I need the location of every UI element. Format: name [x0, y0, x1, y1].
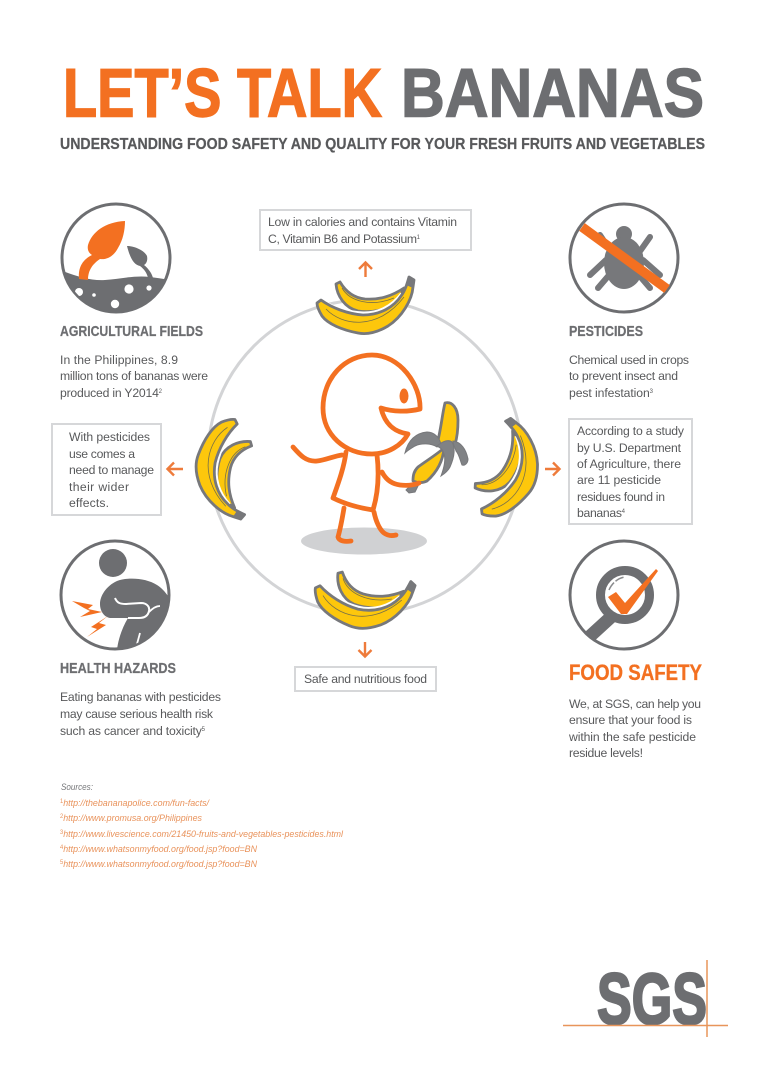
callout: nutrition: [260, 210, 471, 250]
text: food safety: within the safe pesticide: [568, 730, 696, 744]
callout: USDA study: by U.S. Department: [577, 441, 682, 455]
banana: left: [188, 414, 262, 521]
arrow: right: [545, 462, 560, 476]
text: health hazards: [60, 690, 221, 738]
text: health hazards: such as cancer and toxicity: [60, 724, 202, 738]
banana: right: [459, 416, 558, 529]
logo: SGS: SGS: [597, 960, 707, 1040]
heading: health hazards: HEALTH HAZARDS: [60, 660, 176, 677]
title: LET’S TALK: [63, 54, 382, 132]
sources: 3: [60, 830, 64, 836]
heading: pesticides: PESTICIDES: [569, 323, 643, 340]
title: [63, 54, 704, 132]
sources: Sources:: [61, 782, 93, 792]
sources: 5: [60, 860, 64, 866]
callout: USDA study: According to a study: [577, 424, 685, 438]
text: agricultural fields: 2: [159, 389, 163, 395]
callout: safe food: Safe and nutritious food: [304, 672, 427, 686]
callout: wider effects: effects.: [69, 496, 109, 510]
icon: health hazards: [61, 541, 175, 650]
text: health hazards: may cause serious health risk: [60, 707, 214, 721]
callout: wider effects: need to manage: [69, 463, 154, 477]
callout: wider effects: their wider: [69, 480, 129, 494]
text: pesticides: to prevent insect and: [569, 369, 678, 383]
heading: agricultural fields: AGRICULTURAL FIELDS: [60, 323, 203, 340]
sources: http://thebananapolice.com/fun-facts/: [63, 798, 210, 808]
callout: nutrition: Low in calories and contains Vitamin: [268, 215, 457, 229]
sources: 1: [60, 799, 64, 805]
sources: http://www.whatsonmyfood.org/food.jsp?food=BN: [63, 844, 257, 854]
subtitle: UNDERSTANDING FOOD SAFETY AND QUALITY FOR YOUR FRESH FRUITS AND VEGETABLES: [60, 136, 705, 153]
callout: nutrition: 1: [417, 235, 421, 241]
text: food safety: ensure that your food is: [569, 713, 692, 727]
sources: 4: [60, 845, 64, 851]
callout: USDA study: bananas: [577, 506, 622, 520]
callout: wider effects: [52, 424, 161, 515]
sources: http://www.promusa.org/Philippines: [63, 813, 202, 823]
sources: [60, 782, 344, 869]
text: food safety: residue levels!: [569, 746, 643, 760]
large centre ring: [208, 300, 522, 614]
icon: pesticides: [570, 204, 678, 312]
text: agricultural fields: [60, 353, 208, 400]
callout: USDA study: [569, 419, 692, 524]
heading: food safety: FOOD SAFETY: [569, 660, 702, 685]
character eating a banana: [293, 355, 468, 554]
title: BANANAS: [401, 54, 704, 132]
text: health hazards: Eating bananas with pesticides: [60, 690, 221, 704]
icon: agricultural fields: [60, 202, 172, 314]
text: agricultural fields: produced in Y2014: [60, 386, 159, 400]
callout: USDA study: of Agriculture, there: [577, 457, 681, 471]
text: pesticides: Chemical used in crops: [569, 353, 689, 367]
arrow: down: [358, 642, 372, 656]
sources: 2: [60, 814, 64, 820]
callout: USDA study: are 11 pesticide: [577, 473, 661, 487]
text: pesticides: 3: [650, 389, 654, 395]
callout: USDA study: residues found in: [577, 490, 665, 504]
callout: safe food: [295, 667, 436, 691]
callout: wider effects: With pesticides: [69, 430, 150, 444]
banana: top: [317, 276, 415, 334]
text: pesticides: [569, 353, 689, 400]
sources: http://www.whatsonmyfood.org/food.jsp?food=BN: [63, 859, 257, 869]
sources: http://www.livescience.com/21450-fruits-and-vegetables-pesticides.html: [63, 829, 344, 839]
arrow: left: [168, 462, 183, 476]
text: food safety: [568, 697, 701, 760]
icon: food safety: [570, 541, 678, 649]
arrow: up: [359, 262, 372, 277]
banana: bottom: [309, 561, 417, 638]
callout: USDA study: 4: [622, 509, 626, 515]
text: health hazards: 5: [202, 727, 206, 733]
callout: nutrition: C, Vitamin B6 and Potassium: [268, 232, 417, 246]
text: agricultural fields: million tons of bananas were: [60, 369, 208, 383]
text: pesticides: pest infestation: [569, 386, 650, 400]
callout: wider effects: use comes a: [69, 447, 135, 461]
text: agricultural fields: In the Philippines, 8.9: [60, 353, 178, 367]
text: food safety: We, at SGS, can help you: [569, 697, 701, 711]
